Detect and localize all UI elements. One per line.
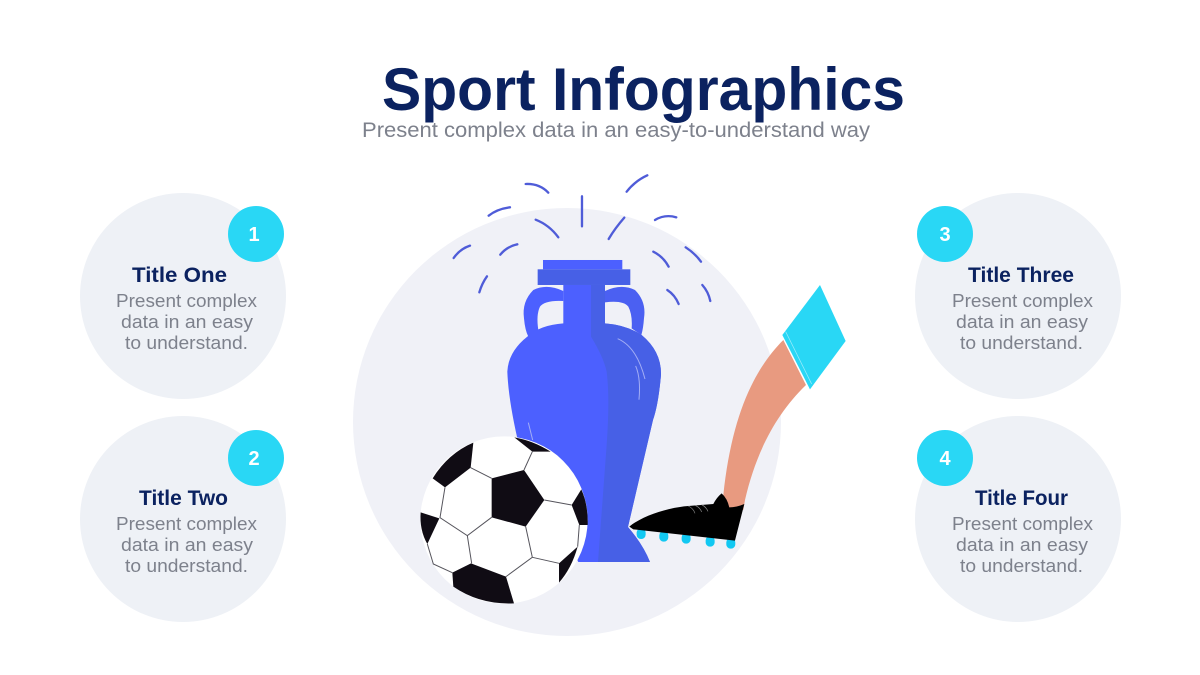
text block: four: Present complex xyxy=(952,514,1093,534)
icon: boot xyxy=(629,493,744,549)
text block: one xyxy=(116,291,257,353)
badge: 3 xyxy=(917,206,973,262)
title: Sport Infographics xyxy=(382,56,905,123)
text block: two: data in an easy xyxy=(121,535,253,555)
badge: 2: 2 xyxy=(248,448,260,470)
badge: 4: 4 xyxy=(939,448,951,470)
text block: two: to understand. xyxy=(125,556,248,576)
text block: four xyxy=(952,514,1093,576)
heading: title one: Title One xyxy=(132,264,227,287)
panel: two xyxy=(80,416,286,622)
badge: 2 xyxy=(228,430,284,486)
trophy shaded side xyxy=(591,285,661,562)
trophy cap xyxy=(543,260,622,269)
text block: four: to understand. xyxy=(960,556,1083,576)
panel: three xyxy=(915,193,1121,399)
text block: three: Present complex xyxy=(952,291,1093,311)
text block: three xyxy=(952,291,1093,353)
heading: title three: Title Three xyxy=(968,264,1074,287)
text block: three: to understand. xyxy=(960,333,1083,353)
badge: 1: 1 xyxy=(248,224,260,246)
panel: one xyxy=(80,193,286,399)
subtitle: Present complex data in an easy-to-understand way xyxy=(362,119,871,142)
leg skin xyxy=(723,340,806,510)
left handle xyxy=(524,287,563,337)
icon: splash lines xyxy=(454,175,710,304)
cleats xyxy=(637,528,735,549)
icon: trophy xyxy=(507,260,661,562)
icon: soccer ball xyxy=(420,436,588,604)
trophy highlights xyxy=(528,339,645,440)
text block: one: Present complex xyxy=(116,291,257,311)
text block: two: Present complex xyxy=(116,514,257,534)
icon: leg xyxy=(723,285,846,510)
trophy body xyxy=(507,285,661,562)
badge: 3: 3 xyxy=(939,224,951,246)
sock seam xyxy=(786,332,812,384)
text block: three: data in an easy xyxy=(956,312,1088,332)
laces xyxy=(688,505,708,513)
trophy rim xyxy=(538,269,630,285)
badge: 4 xyxy=(917,430,973,486)
central background circle xyxy=(353,208,781,636)
right handle xyxy=(605,287,644,335)
heading: title two: Title Two xyxy=(139,487,228,510)
text block: four: data in an easy xyxy=(956,535,1088,555)
sock xyxy=(782,285,846,389)
boot upper xyxy=(629,493,744,541)
text block: two xyxy=(116,514,257,576)
badge: 1 xyxy=(228,206,284,262)
text block: one: data in an easy xyxy=(121,312,253,332)
heading: title four: Title Four xyxy=(975,487,1068,510)
text block: one: to understand. xyxy=(125,333,248,353)
panel: four xyxy=(915,416,1121,622)
